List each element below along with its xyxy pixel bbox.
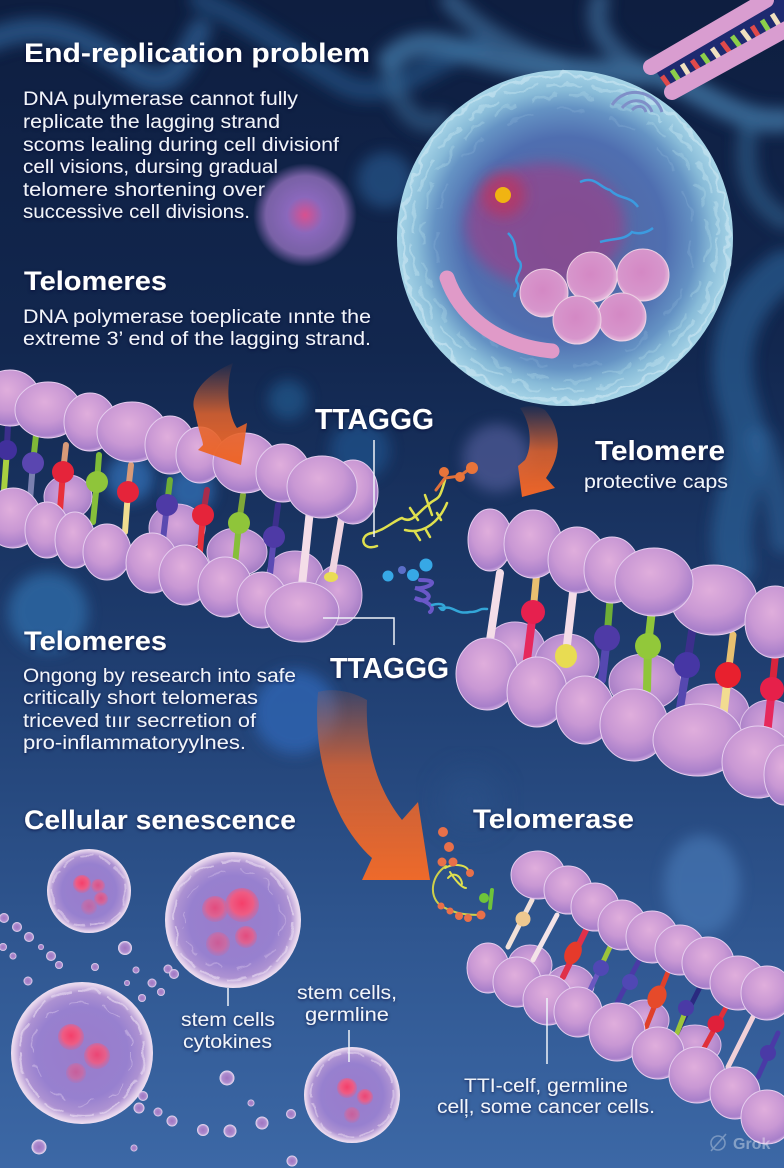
organelle swirl (612, 92, 662, 112)
watermark: Grok (711, 1134, 770, 1153)
top strand beads (0, 370, 378, 524)
back strand beads (485, 622, 784, 756)
top strand beads (468, 509, 784, 658)
text block: ongoing research: pro-inflammatoryylnes. (23, 733, 246, 754)
connector line: stem cells cytokines (227, 988, 229, 1006)
label: stem cells cytokines: stem cells (181, 1010, 275, 1031)
DNA double helix right (456, 509, 784, 805)
bottom strand beads (456, 638, 784, 805)
label: Telomere protective caps: protective caps (584, 472, 728, 493)
label: stem cells germline: stem cells, (297, 983, 397, 1004)
text block: ongoing research: critically short telomeras (23, 688, 258, 709)
small DNA strand top right (651, 0, 784, 92)
label: stem cells germline (297, 983, 397, 1026)
DNA double helix left (0, 370, 378, 642)
heading: Telomeres: Telomeres (24, 266, 167, 296)
mitochondrion (447, 278, 552, 351)
back strand beads (508, 945, 721, 1065)
senescent cell 4 (304, 1047, 400, 1143)
text block: ongoing research (23, 666, 296, 754)
base pairs (0, 425, 342, 585)
text block: ongoing research: triceved tıır secrretion of (23, 711, 257, 732)
blue squiggles (508, 180, 653, 297)
telomerase enzyme yellow-orange (363, 462, 478, 547)
connector line: top TTAGGG (373, 440, 375, 537)
heading: Telomerase: Telomerase (473, 804, 634, 834)
senescent cell 1 (47, 849, 131, 933)
text block: telomeres (23, 307, 371, 350)
heading: Telomeres second: Telomeres (24, 626, 167, 656)
telomerase enzyme small (433, 827, 492, 922)
large cell (397, 70, 733, 406)
label: TTAGGG lower: TTAGGG (330, 653, 449, 685)
connector line: bottom right (546, 998, 548, 1064)
text block: ongoing research: Ongong by research into safe (23, 666, 296, 687)
base pairs (508, 900, 778, 1077)
base pairs (490, 570, 784, 735)
big arrow (317, 690, 430, 880)
connector line: stem cells germline (348, 1030, 350, 1062)
bottom strand beads (467, 943, 784, 1144)
text block: end-replication: replicate the lagging strand (23, 112, 280, 133)
label: TTI-celf germline (437, 1076, 655, 1118)
arrow: cell to right strand (518, 406, 558, 497)
bottom strand beads (0, 488, 339, 642)
watermark: Grok: Grok (733, 1136, 770, 1153)
label: TTI-celf germline: TTI-celf, germline (464, 1076, 628, 1097)
label: TTAGGG upper: TTAGGG (315, 404, 434, 436)
text block: end-replication (23, 89, 340, 223)
senescent cell 3 (11, 982, 153, 1124)
label: TTI-celf germline: cell̦, some cancer cells. (437, 1097, 655, 1118)
top strand beads (511, 851, 784, 1020)
DNA strand bottom right (467, 851, 784, 1144)
text block: telomeres: DNA polymerase toeplicate ınnte the (23, 307, 371, 328)
text block: end-replication: scoms lealing during cell divisionf (23, 135, 340, 156)
heading: Cellular senescence: Cellular senescence (24, 805, 296, 835)
label: stem cells germline: germline (305, 1005, 389, 1026)
cytokine particles (0, 913, 298, 1166)
text block: end-replication: successive cell divisions. (23, 202, 250, 223)
nucleus cluster (520, 249, 669, 344)
text block: end-replication: telomere shortening over (23, 180, 266, 201)
heading: End-replication problem: End-replication problem (24, 38, 370, 68)
label: Telomere protective caps (584, 435, 728, 493)
text block: end-replication: cell visions, dursing gradual (23, 157, 278, 178)
label: stem cells cytokines (181, 1010, 275, 1053)
arrow: to left strand (193, 363, 247, 465)
label: Telomere protective caps: Telomere (595, 435, 725, 466)
blue RNA coil (382, 558, 487, 613)
back strand beads (44, 475, 362, 625)
connector line: lower TTAGGG (323, 618, 394, 645)
label: stem cells cytokines: cytokines (183, 1032, 272, 1053)
text block: telomeres: extreme 3’ end of the lagging strand. (23, 329, 371, 350)
senescent cell 2 (165, 852, 301, 988)
text block: end-replication: DNA pulymerase cannot fully (23, 89, 299, 110)
